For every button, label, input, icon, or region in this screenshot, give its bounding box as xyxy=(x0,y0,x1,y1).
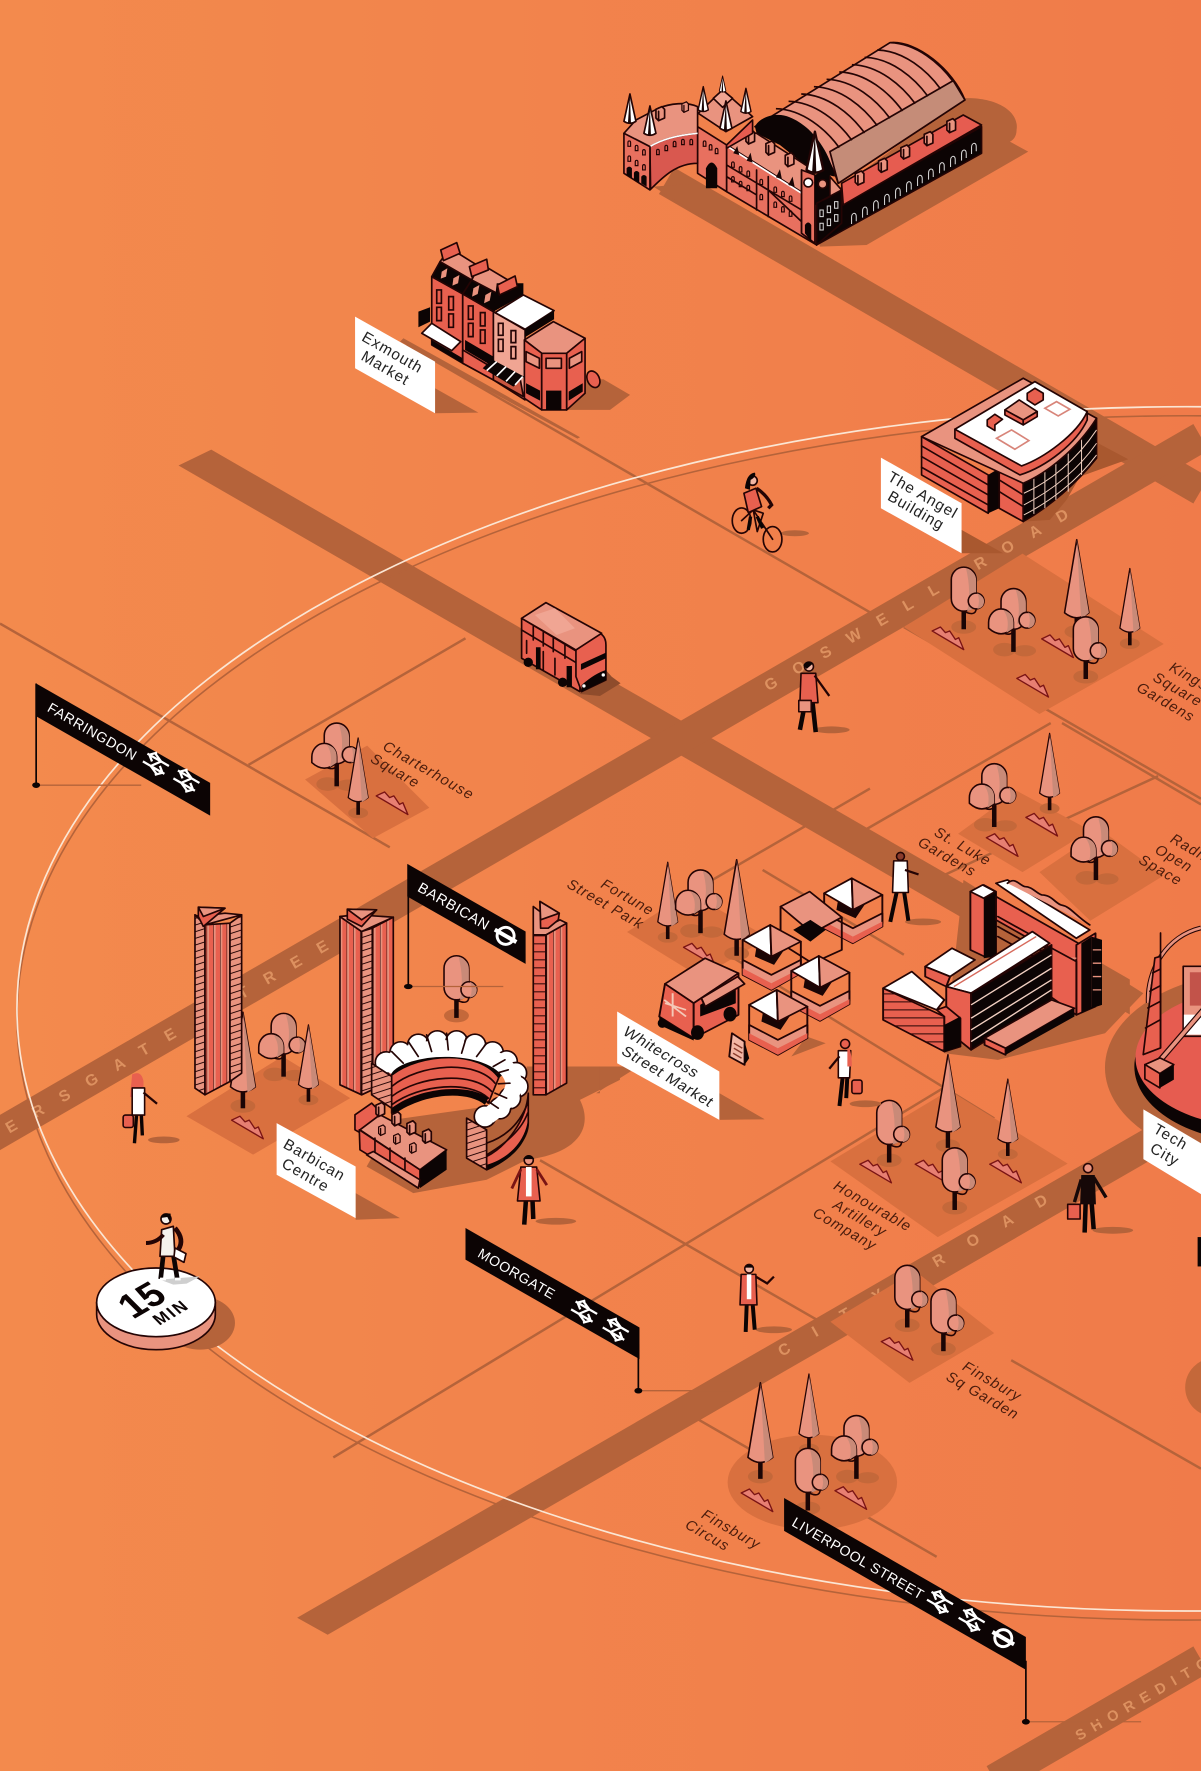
bus windows xyxy=(522,627,580,675)
label: Finsbury Sq Garden: Finsbury xyxy=(959,1359,1024,1405)
mansard roof xyxy=(728,132,817,202)
man in red coat xyxy=(512,1155,576,1225)
station flag: Liverpool Street: LIVERPOOL STREET xyxy=(789,1514,927,1603)
theatre scalloped roof xyxy=(375,1031,528,1127)
house 1 xyxy=(432,243,477,363)
sandwich board xyxy=(729,1033,749,1065)
label: Whitecross Street Market xyxy=(617,1012,764,1120)
bus wheels xyxy=(524,658,567,687)
tower 1 xyxy=(195,907,242,1095)
spires xyxy=(624,76,751,136)
central block xyxy=(698,90,753,192)
corner house xyxy=(524,322,602,410)
Radnor Open Space tree xyxy=(1071,817,1119,885)
road: Shoreditch xyxy=(994,1660,1201,1771)
walking man xyxy=(146,1213,186,1279)
Finsbury Square Garden trees xyxy=(881,1265,964,1360)
label: Kings Square Gardens: Gardens xyxy=(1134,680,1197,726)
display frame xyxy=(1183,966,1201,1036)
label: Fortune Street Park: Fortune xyxy=(598,876,657,920)
label: Tech City: Tech xyxy=(1150,1121,1191,1154)
theatre back wall xyxy=(392,1056,499,1115)
people xyxy=(123,473,1133,1333)
roof side xyxy=(830,81,965,183)
cyclist xyxy=(732,473,809,552)
figure shadow on disc xyxy=(160,1276,200,1285)
label: St Luke Gardens: Gardens xyxy=(915,835,979,881)
curved arch xyxy=(1148,928,1201,1003)
label: Charterhouse Square: Charterhouse xyxy=(380,739,477,804)
bus roof panel xyxy=(535,608,575,635)
corner block xyxy=(817,188,842,245)
15: 15 xyxy=(109,1275,175,1326)
label: Honourable Artillery Company: Honourable xyxy=(831,1178,914,1236)
station flag: Farringdon: FARRINGDON xyxy=(45,699,140,764)
side wall xyxy=(922,437,1023,522)
shed front opening xyxy=(755,115,835,177)
label: Tech City: City xyxy=(1147,1140,1182,1170)
roof terrace xyxy=(955,382,1087,466)
label: Barbican Centre: Centre xyxy=(279,1155,332,1196)
station flag: Liverpool Street xyxy=(784,1498,1141,1725)
Finsbury Circus trees xyxy=(741,1374,879,1515)
label: Radnor Open Space: Space xyxy=(1136,852,1185,890)
building: Barbican towers and centre xyxy=(195,864,620,1220)
label: Tech City xyxy=(1143,1109,1201,1194)
label: Exmouth Market: Exmouth xyxy=(359,329,426,377)
label: Honourable Artillery Company: Company xyxy=(810,1205,880,1255)
walker in red jacket with satchel xyxy=(799,662,850,733)
building: The Angel Building xyxy=(881,378,1128,553)
house 2 xyxy=(463,259,513,380)
label: The Angel Building: Building xyxy=(885,488,947,534)
theatre outer wall xyxy=(487,1093,528,1170)
arched windows xyxy=(852,143,976,224)
Barbican trees xyxy=(230,956,477,1139)
plinth xyxy=(1145,1058,1174,1088)
Whitecross market and Old Street buildings xyxy=(596,878,1143,1120)
label: Exmouth Market xyxy=(355,317,478,413)
left wing xyxy=(624,102,698,190)
bus front grille xyxy=(582,670,606,692)
theatre white roof ring xyxy=(384,1033,514,1116)
building: Exmouth Market xyxy=(355,243,630,439)
flag: Barbican: BARBICAN xyxy=(415,880,492,934)
train shed base xyxy=(817,127,982,245)
roof xyxy=(922,378,1097,483)
road name: City Road: CITY ROAD xyxy=(775,1178,1075,1360)
shadow xyxy=(653,98,1028,260)
roof terrace rim xyxy=(955,412,1087,475)
disc top xyxy=(97,1268,215,1337)
label: Finsbury Circus: Finsbury xyxy=(698,1507,763,1553)
man with phone xyxy=(740,1264,792,1333)
hotel wall xyxy=(727,145,817,245)
platform rim xyxy=(1134,991,1201,1142)
road name: Goswell Road: GOSWELL ROAD xyxy=(762,496,1089,695)
Old Street lower blocks xyxy=(883,948,975,1052)
house 3 xyxy=(493,276,554,400)
label: Finsbury Sq Garden: Sq Garden xyxy=(943,1369,1021,1423)
deck vents xyxy=(855,119,956,185)
road names xyxy=(0,496,1201,1744)
road: St Pancras to Angel xyxy=(667,181,1201,490)
Old Street office xyxy=(970,880,1102,1015)
15 minute walking radius xyxy=(17,407,1201,1620)
stalls xyxy=(743,878,882,1055)
Tech City roundabout xyxy=(1105,928,1201,1417)
hatched sail xyxy=(1143,933,1161,1055)
Kings Square Gardens trees xyxy=(932,540,1140,697)
bus side xyxy=(522,618,580,692)
hotel windows xyxy=(732,162,809,226)
diagonal strut xyxy=(1159,1006,1201,1061)
circular shadow xyxy=(367,1066,620,1193)
corner windows xyxy=(820,202,838,230)
St Luke Gardens trees xyxy=(969,733,1060,856)
shadow xyxy=(596,880,1143,1119)
diagonal strut face xyxy=(1159,1006,1201,1061)
road: central diagonal xyxy=(179,450,1130,1015)
disc shadow xyxy=(165,1296,235,1350)
radius shadow xyxy=(17,416,1201,1620)
woman at left xyxy=(123,1073,180,1143)
park labels xyxy=(367,651,1201,1568)
theatre end blocks xyxy=(372,1063,487,1170)
label: Barbican Centre: Barbican xyxy=(280,1136,348,1185)
Charterhouse Square trees xyxy=(312,723,408,818)
building: St Pancras station xyxy=(624,42,1028,260)
glazing grid xyxy=(1024,430,1097,515)
label: Radnor Open Space: Open xyxy=(1152,842,1195,876)
roof ribs xyxy=(776,43,953,148)
label: Honourable Artillery Company: Artillery xyxy=(829,1197,890,1241)
label: St Luke Gardens: St. Luke xyxy=(931,824,994,870)
Old Street main block xyxy=(946,932,1074,1055)
barrel roof xyxy=(755,42,965,183)
radius line xyxy=(17,407,1201,1611)
bus doors xyxy=(536,647,572,687)
theatre inner black eaves xyxy=(391,1055,501,1076)
bus front xyxy=(576,633,606,692)
label: Whitecross Street Market: Street Market xyxy=(618,1043,717,1110)
road: City Road xyxy=(297,1124,1152,1635)
ground shadow xyxy=(1105,972,1201,1164)
shadow xyxy=(1023,443,1128,522)
Honourable Artillery Company trees xyxy=(860,1055,1021,1214)
label: Exmouth Market: Market xyxy=(358,348,412,389)
disc side xyxy=(97,1302,215,1350)
flag: Barbican xyxy=(404,864,526,989)
dormers and chimneys xyxy=(733,130,795,187)
label: Barbican Centre xyxy=(277,1123,400,1220)
arch sculpture xyxy=(1143,928,1201,1088)
clock tower xyxy=(802,132,842,243)
walker in white with coffee xyxy=(890,852,941,925)
hotel detail xyxy=(727,146,817,233)
tower 2 xyxy=(340,909,393,1095)
food truck xyxy=(658,958,745,1041)
deck xyxy=(842,115,982,205)
label: Charterhouse Square: Square xyxy=(367,751,422,792)
off-canvas shapes at right edge xyxy=(1185,1237,1201,1417)
15 minute marker xyxy=(97,1213,235,1350)
road: Aldersgate Street and Goswell Road xyxy=(0,437,1201,1146)
roof plant xyxy=(987,388,1070,449)
bus roof xyxy=(522,603,602,650)
minor streets xyxy=(0,345,1201,1557)
foyer block xyxy=(355,1102,447,1188)
station flag: Moorgate: MOORGATE xyxy=(475,1245,558,1302)
bus headlights xyxy=(582,673,605,688)
label: Fortune Street Park: Street Park xyxy=(564,876,646,933)
vehicle: double decker bus xyxy=(522,603,621,696)
MIN caption: MIN xyxy=(149,1297,194,1329)
label: Finsbury Circus: Circus xyxy=(682,1517,732,1555)
label: The Angel Building xyxy=(881,458,1003,553)
man in black suit xyxy=(1068,1164,1133,1234)
station flag: Farringdon xyxy=(32,684,210,816)
label: The Angel Building: The Angel xyxy=(885,469,961,522)
park grounds xyxy=(186,554,1164,1530)
curved arch face xyxy=(1148,928,1201,1003)
label: Whitecross Street Market: Whitecross xyxy=(619,1024,703,1081)
Fortune Street Park trees xyxy=(658,860,749,966)
bus front band xyxy=(581,653,606,670)
shadow xyxy=(400,338,630,439)
shopfronts and awnings xyxy=(418,307,524,397)
bus shadow xyxy=(580,663,621,696)
woman with red bag xyxy=(829,1039,881,1107)
station flag: Moorgate xyxy=(465,1228,734,1394)
platform top xyxy=(1135,987,1201,1127)
tower 3 xyxy=(533,902,567,1095)
glass wall xyxy=(1023,418,1097,522)
trees and park planting xyxy=(230,540,1140,1515)
